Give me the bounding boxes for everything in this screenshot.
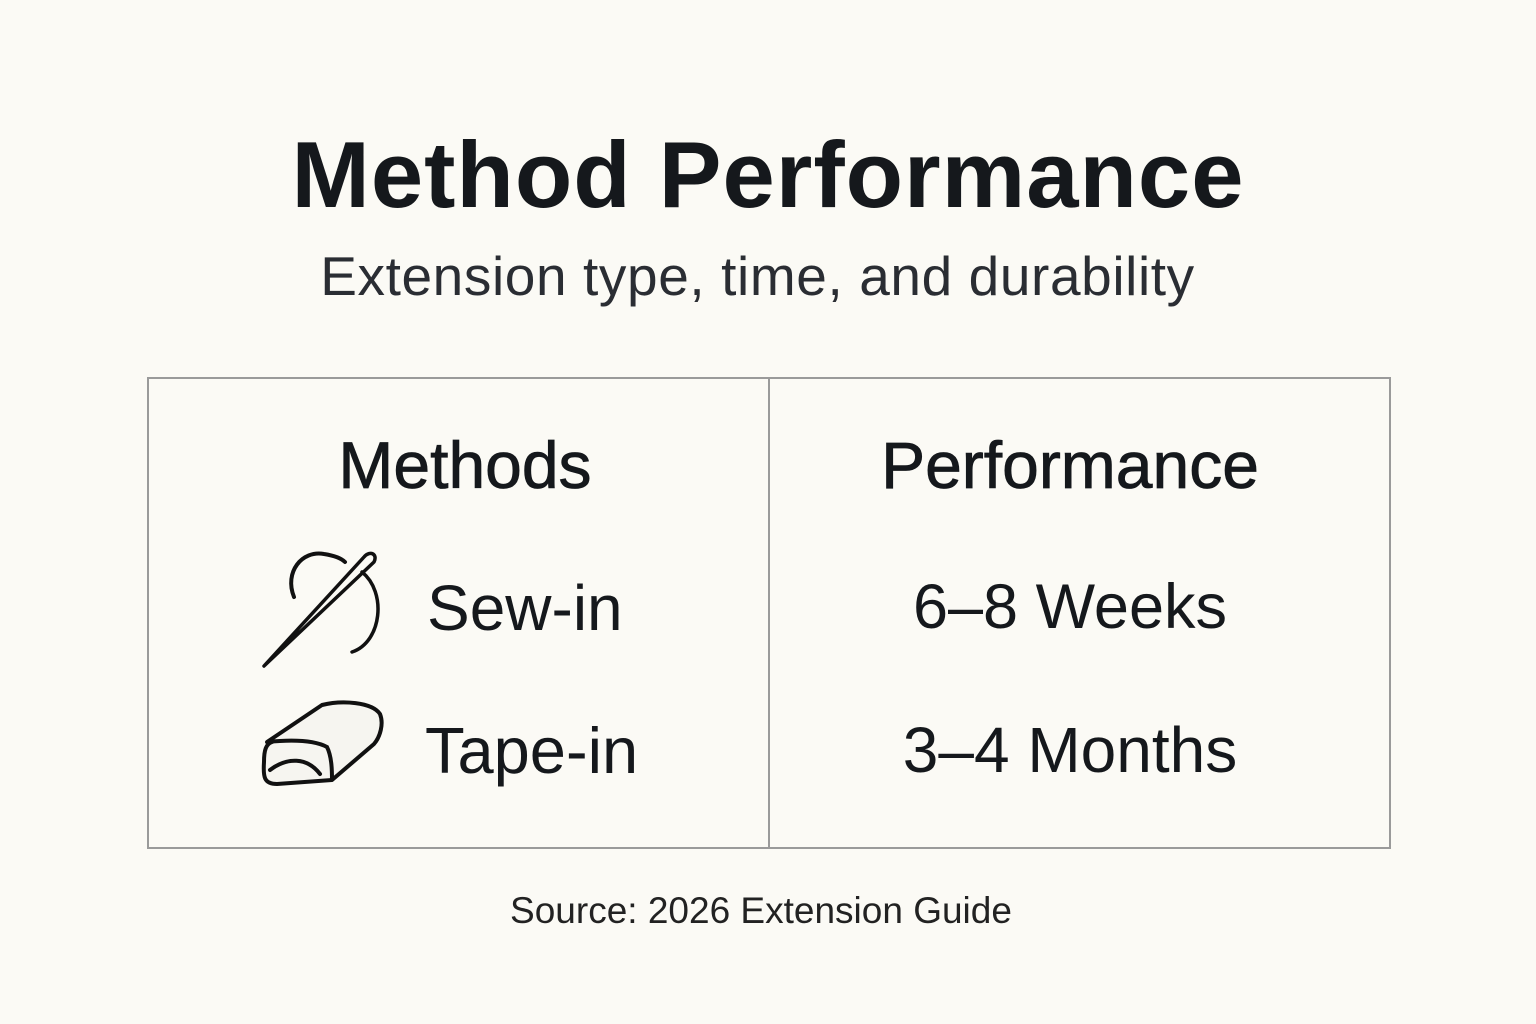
header: Methods: Methods [338, 428, 592, 502]
header: Performance: Performance [881, 428, 1259, 502]
value: 6-8 Weeks: 6–8 Weeks [913, 572, 1227, 642]
table panel [147, 377, 1391, 849]
source note: Source: 2026 Extension Guide [510, 890, 1012, 931]
title: Method Performance [292, 122, 1244, 227]
icon: tape [262, 700, 384, 786]
value: 3-4 Months: 3–4 Months [903, 714, 1237, 786]
icon: needle and thread [262, 552, 380, 668]
column divider [768, 379, 770, 847]
label: Tape-in: Tape-in [425, 714, 638, 787]
label: Sew-in: Sew-in [427, 572, 623, 644]
subtitle: Extension type, time, and durability [320, 245, 1195, 307]
